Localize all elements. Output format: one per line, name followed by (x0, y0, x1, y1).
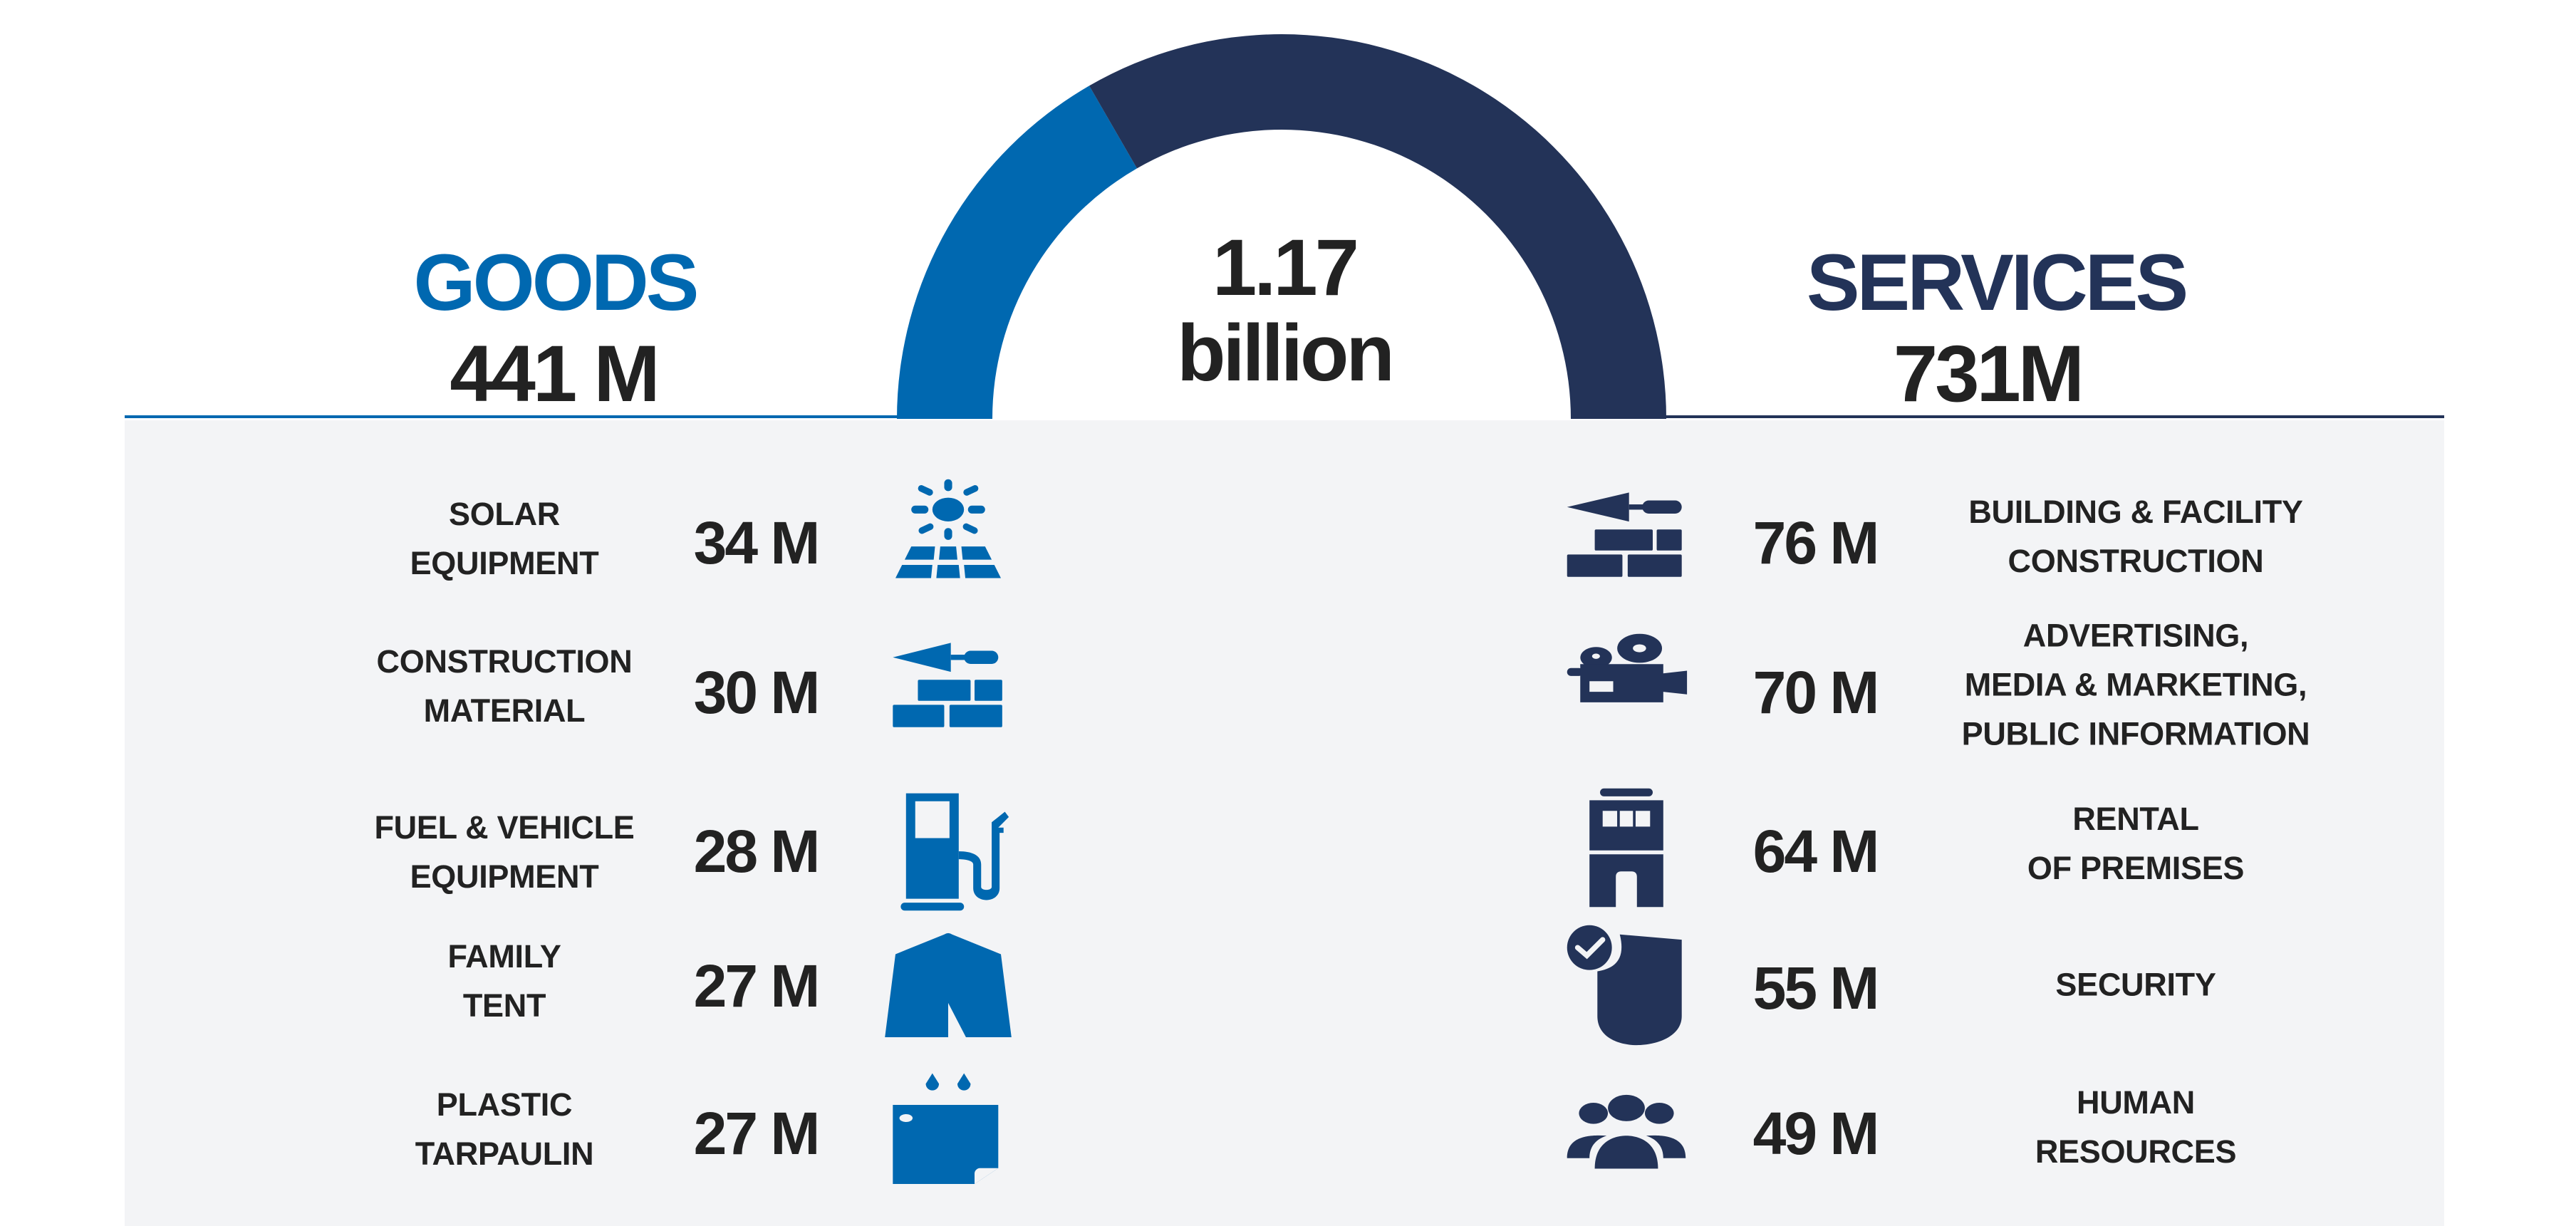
label: building: BUILDING & FACILITY (1968, 494, 2303, 530)
icon: trowel and bricks (893, 643, 1002, 727)
label: hr: RESOURCES (2035, 1133, 2236, 1170)
label: fuel (374, 809, 635, 895)
row: rental (1589, 788, 2244, 908)
label: tarpaulin (415, 1086, 593, 1172)
value: construction: 30 M (694, 659, 818, 726)
goods total: 441 M (450, 329, 658, 418)
label: rental: OF PREMISES (2027, 850, 2244, 886)
value: building: 76 M (1753, 509, 1877, 576)
label: hr: HUMAN (2077, 1084, 2195, 1121)
row: construction material (377, 643, 1002, 729)
label: advertising: MEDIA & MARKETING, (1965, 667, 2307, 702)
value: tarpaulin: 27 M (694, 1100, 818, 1167)
label: advertising (1962, 617, 2310, 752)
label: construction material: CONSTRUCTION (377, 643, 632, 680)
label: rental (2027, 801, 2244, 886)
row: plastic tarpaulin (415, 1073, 999, 1184)
value: hr: 49 M (1753, 1100, 1877, 1167)
row: security (1567, 925, 2216, 1046)
label: tarpaulin: PLASTIC (437, 1086, 572, 1123)
icon: solar panel (895, 479, 1001, 578)
row: family tent (447, 933, 1012, 1037)
label: fuel: EQUIPMENT (410, 858, 598, 895)
label: tent: FAMILY (447, 938, 561, 975)
icon: tarpaulin (893, 1073, 999, 1184)
label: rental: RENTAL (2072, 801, 2199, 837)
row: human resources (1567, 1084, 2236, 1170)
label: advertising: ADVERTISING, (2023, 617, 2248, 654)
value: fuel: 28 M (694, 818, 818, 885)
label: construction material: MATERIAL (424, 692, 585, 729)
panel: grey background (125, 420, 2444, 1226)
value: rental: 64 M (1753, 818, 1877, 885)
donut chart (897, 34, 1666, 419)
icon: trowel and bricks navy (1567, 492, 1682, 577)
label: tent (447, 938, 561, 1024)
heading: services: SERVICES (1807, 238, 2186, 327)
total value (1177, 223, 1392, 398)
row: advertising (1567, 617, 2310, 752)
icon: video camera (1567, 634, 1687, 702)
label: tent: TENT (463, 987, 546, 1024)
value: security: 55 M (1753, 955, 1877, 1022)
heading: goods: GOODS (414, 238, 696, 327)
label: solar (410, 496, 598, 581)
goods line (125, 415, 901, 418)
label: advertising: PUBLIC INFORMATION (1962, 715, 2310, 752)
value: tent: 27 M (694, 952, 818, 1019)
icon: fuel pump (900, 794, 1009, 910)
row: solar equipment (410, 479, 1001, 581)
total value: 1.17 (1212, 223, 1356, 312)
label: tarpaulin: TARPAULIN (415, 1136, 593, 1172)
total value: billion (1177, 308, 1392, 398)
label: building: CONSTRUCTION (2008, 543, 2263, 579)
icon: shield with check (1567, 925, 1682, 1046)
row: building construction (1567, 492, 2303, 579)
label: solar: SOLAR (449, 496, 560, 532)
label: construction material (377, 643, 632, 729)
value: solar: 34 M (694, 509, 818, 576)
services total: 731M (1894, 329, 2082, 418)
label: solar: EQUIPMENT (410, 545, 598, 581)
label: hr (2035, 1084, 2236, 1170)
label: security: SECURITY (2055, 966, 2216, 1003)
label: fuel: FUEL & VEHICLE (374, 809, 635, 846)
row: fuel (374, 794, 1009, 910)
label: building (1968, 494, 2303, 579)
icon: people (1567, 1094, 1686, 1168)
services line (1663, 415, 2444, 418)
value: advertising: 70 M (1753, 659, 1877, 726)
icon: building (1589, 788, 1663, 908)
icon: tent (885, 933, 1012, 1037)
